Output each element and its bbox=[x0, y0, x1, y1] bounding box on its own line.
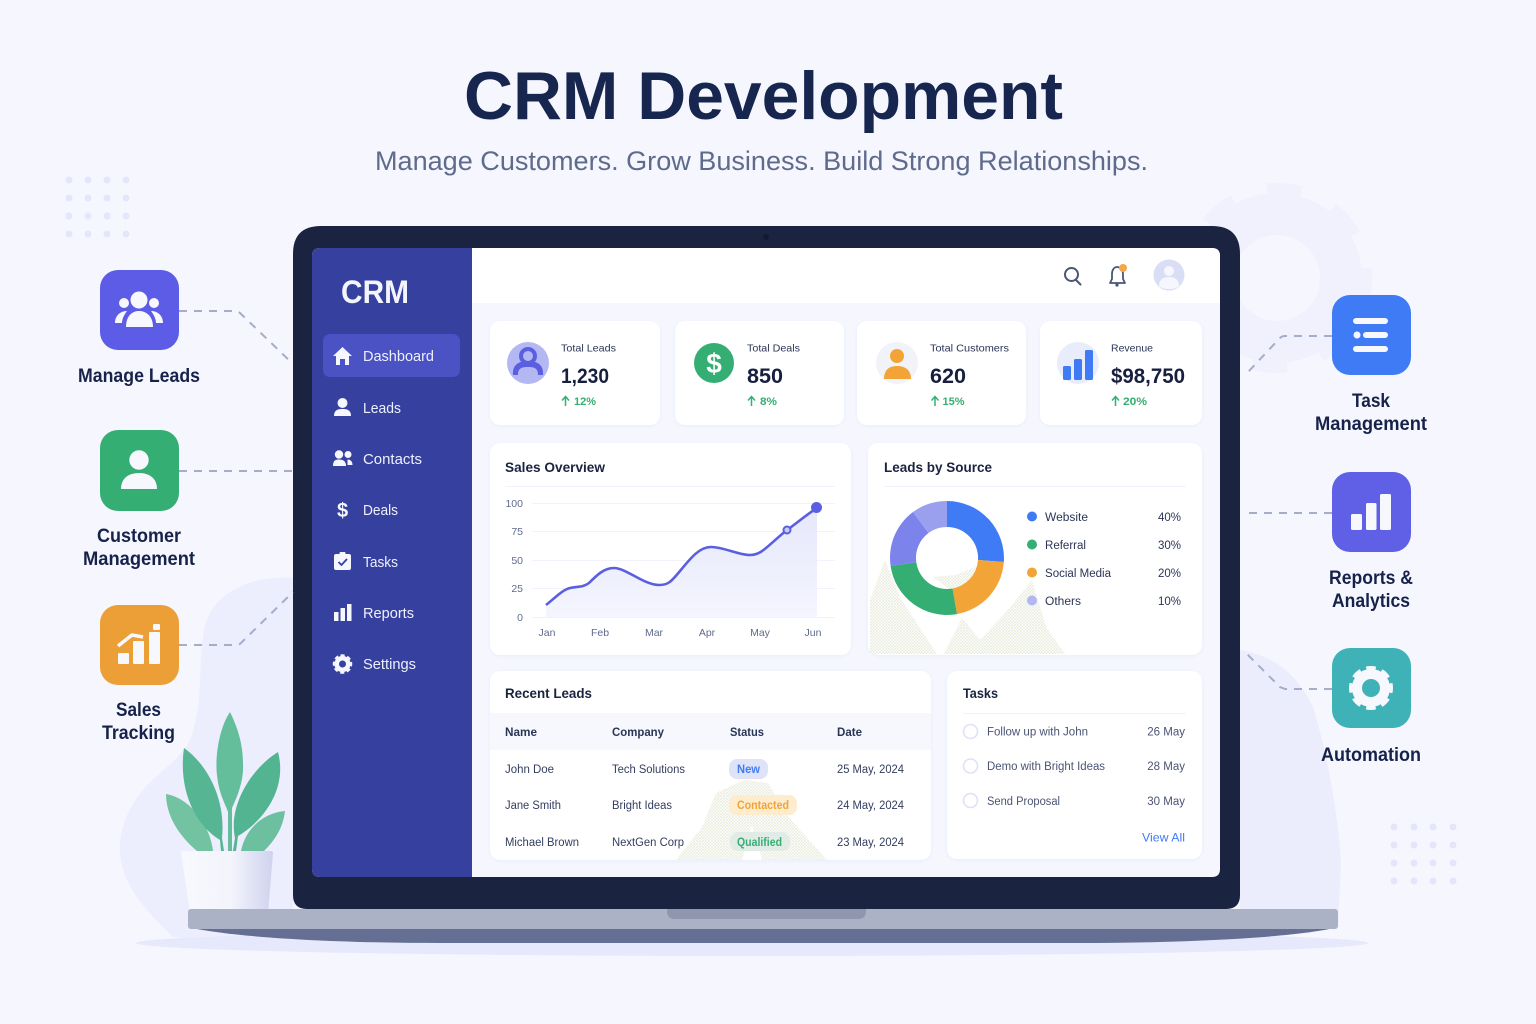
nav: deals: $ bbox=[337, 500, 348, 522]
stat card: total deals: 850 bbox=[747, 365, 783, 388]
heading: recent leads: Recent Leads bbox=[505, 685, 592, 701]
nav: contacts bbox=[333, 450, 422, 468]
leaf: far right bbox=[241, 811, 285, 851]
task: follow up bbox=[964, 724, 1185, 738]
icon: task list bbox=[1354, 321, 1385, 349]
label: sales tracking: Sales bbox=[116, 700, 161, 721]
stat card: total leads: Total Leads bbox=[561, 342, 616, 354]
top bar bbox=[472, 248, 1220, 303]
legend: 30% bbox=[1158, 540, 1181, 552]
x axis labels: Jun bbox=[805, 627, 822, 639]
icon: gear bbox=[1348, 665, 1394, 711]
task: follow up: 26 May bbox=[1147, 726, 1185, 738]
table header: Name bbox=[505, 727, 537, 739]
row: michael brown: 23 May, 2024 bbox=[837, 837, 905, 849]
icon: avatar bbox=[1154, 260, 1184, 290]
decorative dots: top left bbox=[66, 176, 130, 238]
stat card: total customers: 15% bbox=[942, 396, 965, 408]
connector: sales tracking bbox=[179, 592, 293, 645]
connector: reports bbox=[1245, 512, 1332, 514]
decorative dots: bottom right bbox=[1390, 824, 1456, 884]
task: proposal: 30 May bbox=[1147, 796, 1185, 808]
y axis labels: 25 bbox=[511, 583, 523, 595]
heading: leads by source: Leads by Source bbox=[884, 459, 992, 475]
table header bbox=[505, 727, 862, 739]
connector: task management bbox=[1248, 336, 1332, 372]
nav: leads: Leads bbox=[363, 401, 401, 417]
icon: revenue bars bbox=[1057, 342, 1099, 384]
y axis labels: 100 bbox=[505, 498, 523, 510]
label: task management: Management bbox=[1315, 414, 1428, 435]
label: customer management bbox=[83, 526, 196, 570]
connector: customer management bbox=[179, 470, 293, 472]
label: automation: Automation bbox=[1321, 745, 1421, 766]
feature: reports and analytics bbox=[1329, 472, 1413, 612]
label: sales tracking: Tracking bbox=[102, 723, 175, 744]
label: customer management: Management bbox=[83, 549, 196, 570]
label: reports and analytics bbox=[1329, 568, 1413, 612]
legend: 10% bbox=[1158, 596, 1181, 608]
stat card: revenue: $98,750 bbox=[1111, 365, 1185, 388]
row: michael brown: Qualified bbox=[737, 837, 782, 849]
heading: tasks: Tasks bbox=[963, 685, 998, 701]
y axis labels: 0 bbox=[517, 612, 523, 624]
sidebar bbox=[312, 248, 472, 877]
row: jane smith: Bright Ideas bbox=[612, 800, 672, 812]
laptop deck bbox=[188, 909, 1338, 929]
table header band bbox=[490, 713, 931, 750]
row: john doe: 25 May, 2024 bbox=[837, 764, 905, 776]
nav: reports bbox=[334, 604, 414, 622]
background blob: right bbox=[1240, 650, 1341, 925]
icon: bell bbox=[1110, 264, 1127, 287]
legend: 40% bbox=[1158, 512, 1181, 524]
nav: tasks bbox=[334, 552, 398, 571]
task: proposal bbox=[964, 794, 1185, 808]
legend: 20% bbox=[1158, 568, 1181, 580]
laptop bbox=[188, 226, 1338, 943]
pot bbox=[181, 851, 273, 925]
label: customer management: Customer bbox=[97, 526, 182, 547]
nav: contacts: Contacts bbox=[363, 452, 422, 468]
icon: bars bbox=[1351, 494, 1391, 530]
row: john doe bbox=[505, 759, 905, 779]
laptop lower base bbox=[192, 928, 1334, 943]
x axis labels: Jan bbox=[539, 627, 556, 639]
stat card: total leads: 12% bbox=[574, 396, 596, 408]
stat card: total deals: 8% bbox=[760, 396, 777, 408]
laptop notch bbox=[667, 909, 866, 919]
task: demo bbox=[964, 759, 1185, 773]
panel: recent leads bbox=[490, 671, 931, 860]
background blob: left bbox=[120, 578, 293, 948]
logo: CRM bbox=[341, 274, 409, 310]
nav: deals bbox=[337, 500, 398, 522]
label: reports and analytics: Reports & bbox=[1329, 568, 1413, 589]
stat card: total customers: Total Customers bbox=[930, 342, 1009, 354]
row: jane smith: Jane Smith bbox=[505, 800, 561, 812]
row: jane smith: Contacted bbox=[737, 800, 789, 812]
nav: settings: Settings bbox=[363, 657, 416, 673]
stat card: revenue: 20% bbox=[1123, 396, 1147, 408]
feature: automation bbox=[1321, 648, 1421, 766]
task: proposal: Send Proposal bbox=[987, 796, 1060, 808]
stat card: total leads bbox=[490, 321, 660, 425]
nav: deals: Deals bbox=[363, 503, 398, 519]
chart marker: may bbox=[784, 526, 790, 534]
task: follow up: Follow up with John bbox=[987, 726, 1088, 738]
label: task management: Task bbox=[1352, 391, 1390, 412]
legend: Referral bbox=[1045, 540, 1086, 552]
panel: leads by source bbox=[868, 443, 1202, 655]
panel: sales overview bbox=[490, 443, 851, 655]
row: john doe: New bbox=[737, 764, 760, 776]
feature: manage leads bbox=[78, 270, 200, 387]
laptop lid bbox=[293, 226, 1240, 909]
background gear bbox=[1185, 186, 1369, 370]
panel: tasks bbox=[947, 671, 1202, 859]
icon: dollar: $ bbox=[706, 348, 722, 379]
icon: leads bbox=[507, 342, 549, 384]
task: demo: 28 May bbox=[1147, 761, 1185, 773]
row: john doe: John Doe bbox=[505, 764, 554, 776]
connector: manage leads bbox=[179, 311, 292, 363]
row: michael brown: NextGen Corp bbox=[612, 837, 684, 849]
table header: Date bbox=[837, 727, 862, 739]
legend: Others bbox=[1045, 596, 1081, 608]
connector: automation bbox=[1243, 650, 1332, 689]
row: john doe: Tech Solutions bbox=[612, 764, 685, 776]
table header: Status bbox=[730, 727, 764, 739]
leaf: left bbox=[183, 748, 224, 851]
x axis labels: May bbox=[750, 627, 771, 639]
task: demo: Demo with Bright Ideas bbox=[987, 761, 1105, 773]
feature: customer management bbox=[83, 430, 196, 570]
legend: Website bbox=[1045, 512, 1088, 524]
row: jane smith: 24 May, 2024 bbox=[837, 800, 905, 812]
stat card: total deals: Total Deals bbox=[747, 342, 800, 354]
feature: task management bbox=[1315, 295, 1428, 435]
nav: dashboard bbox=[323, 334, 460, 377]
icon: search bbox=[1065, 268, 1080, 284]
subtitle: Manage Customers. Grow Business. Build Strong Relationships. bbox=[375, 146, 1148, 176]
stat card: revenue: Revenue bbox=[1111, 342, 1153, 354]
legend: Social Media bbox=[1045, 568, 1112, 580]
nav: settings bbox=[333, 654, 416, 674]
icon: customer bbox=[876, 342, 918, 384]
label: task management bbox=[1315, 391, 1428, 435]
chart marker: jun bbox=[811, 502, 822, 513]
icon: sales chart bbox=[118, 624, 160, 664]
stat card: total customers: 620 bbox=[930, 365, 966, 388]
label: manage leads: Manage Leads bbox=[78, 366, 200, 387]
speckle texture bbox=[870, 560, 1065, 654]
feature: sales tracking bbox=[100, 605, 179, 744]
stat card: total leads: 1,230 bbox=[561, 365, 609, 388]
y axis labels bbox=[505, 498, 523, 624]
leaf: centre bbox=[216, 712, 243, 851]
stat card: total deals bbox=[675, 321, 844, 425]
row: michael brown: Michael Brown bbox=[505, 837, 579, 849]
x axis labels: Apr bbox=[699, 627, 716, 639]
row: jane smith bbox=[505, 795, 905, 815]
heading: sales overview: Sales Overview bbox=[505, 459, 605, 475]
leaf: right bbox=[233, 752, 280, 851]
camera bbox=[763, 234, 769, 240]
label: sales tracking bbox=[102, 700, 175, 744]
icon: person bbox=[121, 450, 157, 489]
nav: leads bbox=[334, 398, 401, 417]
area under sales line bbox=[546, 508, 817, 617]
label: reports and analytics: Analytics bbox=[1332, 591, 1410, 612]
nav: tasks: Tasks bbox=[363, 555, 398, 571]
table header: Company bbox=[612, 727, 665, 739]
leaf: far left bbox=[166, 794, 213, 851]
icon: dollar bbox=[694, 343, 734, 383]
laptop shadow bbox=[136, 930, 1368, 956]
y axis labels: 75 bbox=[511, 526, 523, 538]
view all link: View All bbox=[1142, 830, 1185, 844]
title: CRM Development bbox=[464, 58, 1063, 134]
nav: reports: Reports bbox=[363, 606, 414, 622]
y axis labels: 50 bbox=[511, 555, 523, 567]
sales line bbox=[546, 508, 817, 605]
legend bbox=[1027, 512, 1181, 608]
stat card: revenue bbox=[1040, 321, 1202, 425]
nav: dashboard: Dashboard bbox=[363, 349, 434, 365]
screen bbox=[312, 248, 1220, 877]
x axis labels: Feb bbox=[591, 627, 609, 639]
x axis labels: Mar bbox=[645, 627, 664, 639]
speckle texture bbox=[676, 780, 827, 860]
plant bbox=[166, 712, 285, 925]
x axis labels bbox=[539, 627, 822, 639]
icon: people bbox=[115, 292, 163, 327]
donut chart bbox=[890, 501, 1004, 615]
stat card: total customers bbox=[857, 321, 1026, 425]
row: michael brown bbox=[505, 832, 905, 851]
